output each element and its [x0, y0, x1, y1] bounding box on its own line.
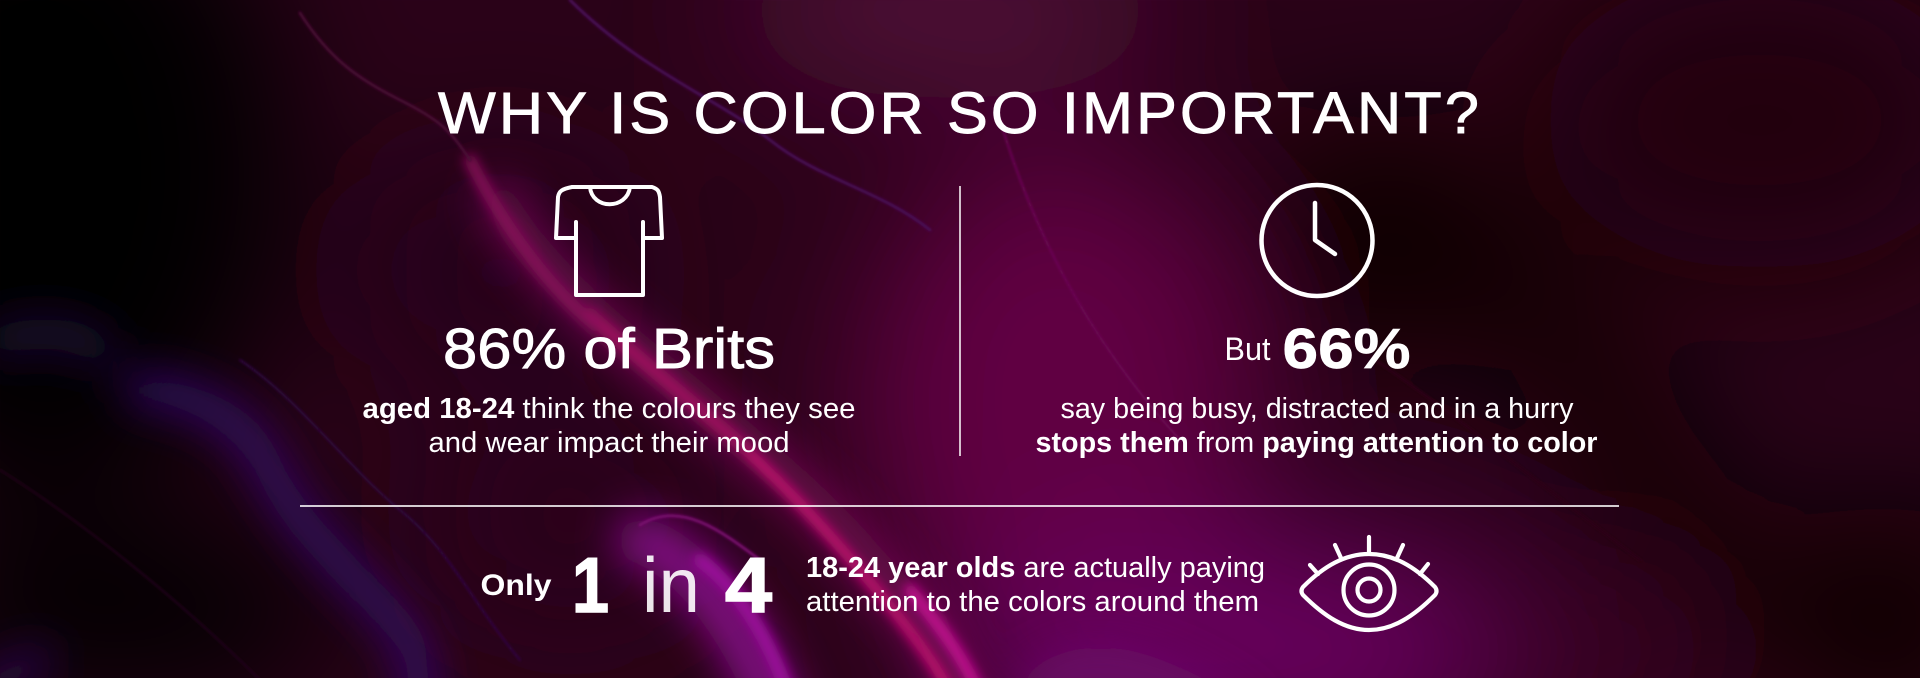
text: being busy description	[1036, 393, 1598, 459]
vertical divider	[959, 186, 961, 456]
text: aged 18-24 description	[362, 393, 856, 459]
text: Only 1 in 4: 4	[725, 541, 772, 629]
heading: But 66%: 66%	[1282, 317, 1410, 381]
left panel: t-shirt statistic	[362, 187, 856, 459]
heading: But 66%: But	[1224, 331, 1271, 367]
text: Only 1 in 4: in	[642, 541, 700, 629]
text: Only 1 in 4	[480, 541, 772, 629]
right panel: clock statistic	[1036, 185, 1598, 459]
text: 18-24 year olds description: 18-24 year olds are actually paying	[806, 552, 1265, 584]
icon: eye	[1302, 537, 1436, 630]
text: being busy description: stops them from paying attention to color	[1036, 427, 1598, 459]
text: aged 18-24 description: aged 18-24 think the colours they see	[362, 393, 856, 425]
icon: t-shirt	[556, 187, 662, 295]
text: aged 18-24 description: and wear impact their mood	[428, 427, 790, 459]
heading: 86% of Brits: 86% of Brits	[443, 317, 775, 381]
heading: But 66%	[1224, 317, 1410, 381]
text: being busy description: say being busy, distracted and in a hurry	[1060, 393, 1574, 425]
horizontal divider	[300, 505, 1619, 507]
icon: clock	[1262, 185, 1372, 296]
bottom statistic: 1 in 4	[480, 537, 1436, 630]
text: 18-24 year olds description	[806, 552, 1265, 618]
text: 18-24 year olds description: attention to the colors around them	[806, 586, 1259, 618]
text: Only 1 in 4: 1	[572, 541, 609, 629]
title: WHY IS COLOR SO IMPORTANT?	[438, 81, 1482, 146]
text: Only 1 in 4: Only	[480, 569, 552, 602]
